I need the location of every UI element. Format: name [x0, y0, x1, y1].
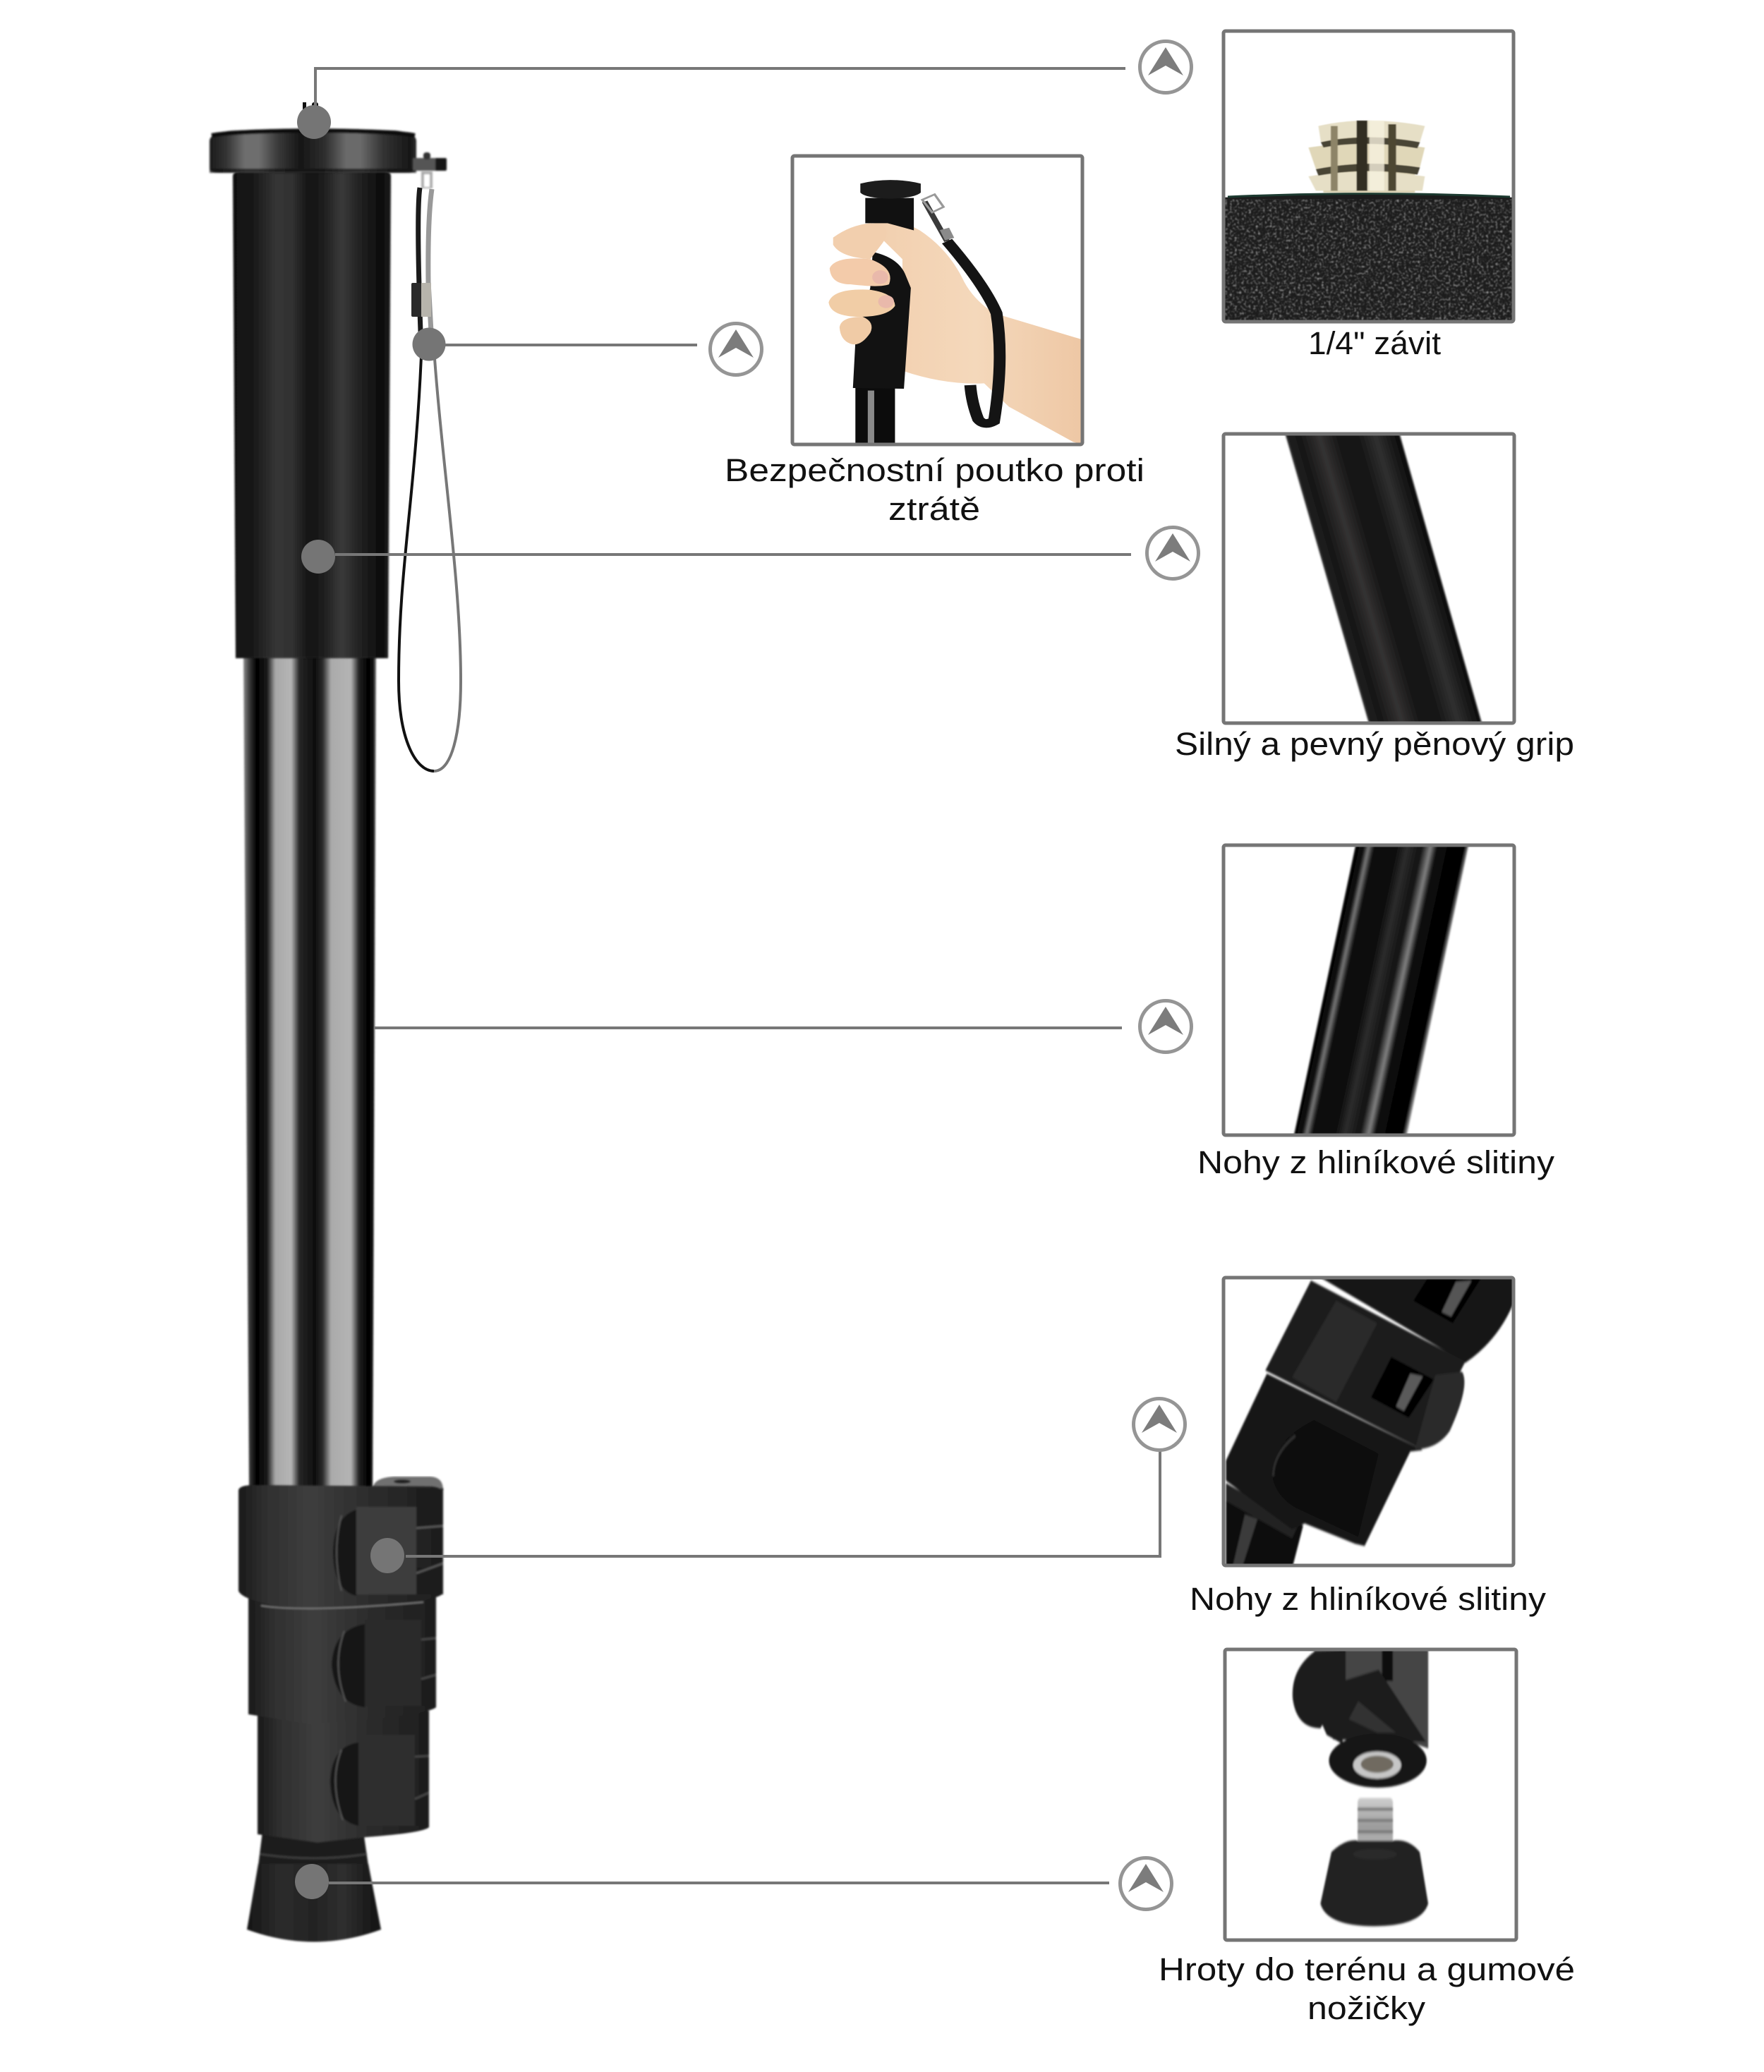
clamp 3	[258, 1711, 429, 1843]
clamp photo: ring	[1226, 1483, 1298, 1539]
clamp photo: lower clamp	[1226, 1374, 1422, 1546]
foot photo: socket disc	[1329, 1733, 1427, 1788]
rubber foot	[247, 1831, 381, 1941]
panel: clamps	[1224, 1274, 1516, 1568]
caption: grip: Silný a pevný pěnový grip	[1175, 726, 1574, 762]
icon: arrow feet	[1120, 1858, 1171, 1909]
strap loop	[399, 339, 434, 771]
foam tube	[1284, 430, 1483, 728]
hand photo: wrist strap	[947, 241, 1000, 423]
strap lug	[413, 152, 447, 188]
hand photo: fingers	[833, 223, 887, 259]
callout dot: grip	[301, 540, 335, 574]
infographic: monopod features	[208, 30, 1573, 2026]
caption: thread: 1/4" závit	[1308, 325, 1442, 361]
callout dot: clamp	[370, 1538, 404, 1573]
callout dot: foot	[295, 1864, 329, 1899]
icon: arrow legs	[1140, 1000, 1191, 1053]
icon: arrow strap	[710, 323, 762, 375]
panel: feet	[1225, 1649, 1516, 1940]
monopod pole	[243, 656, 376, 1489]
clamp 2	[248, 1591, 436, 1724]
hand photo: finger nails	[872, 270, 894, 308]
strap upper band	[418, 188, 421, 332]
brass screw	[1308, 121, 1425, 193]
monopod	[210, 102, 461, 1941]
caption: feet: nožičky	[1307, 1990, 1426, 2026]
panel: strap	[792, 156, 1085, 444]
clamp photo: windows	[1371, 1357, 1434, 1418]
aluminium tube	[1293, 840, 1470, 1141]
foot photo: rubber	[1320, 1841, 1428, 1926]
caption: clamps: Nohy z hliníkové slitiny	[1190, 1581, 1547, 1617]
bracket behind clamp	[373, 1477, 443, 1490]
icon: arrow clamps	[1133, 1398, 1185, 1450]
clamp photo: pole	[1226, 1494, 1303, 1568]
foot photo: screw	[1358, 1798, 1393, 1855]
foam grip	[233, 171, 391, 658]
caption: strap: Bezpečnostní poutko proti	[725, 452, 1144, 488]
top head plate	[210, 128, 416, 173]
connector lines	[315, 68, 1160, 1883]
foot photo: bracket	[1333, 1670, 1426, 1742]
caption: feet: Hroty do terénu a gumové	[1159, 1951, 1575, 1987]
panel: legs	[1224, 840, 1514, 1141]
caption: strap	[725, 452, 1144, 527]
strap sleeve	[411, 283, 421, 317]
hand photo: forearm and palm	[868, 222, 1085, 444]
caption: feet	[1159, 1951, 1575, 2026]
hand photo: grip	[865, 198, 914, 231]
caption: legs: Nohy z hliníkové slitiny	[1197, 1144, 1555, 1180]
foot photo: leg	[1314, 1649, 1428, 1748]
caption: strap: ztrátě	[888, 491, 980, 527]
clamp photo: upper segment	[1314, 1274, 1516, 1363]
callout dot: strap	[412, 327, 446, 361]
icon: arrow thread	[1140, 41, 1191, 93]
clamp 1	[238, 1485, 443, 1608]
strap with lug	[399, 152, 461, 771]
callout dot: thread	[297, 105, 331, 139]
hand photo: head	[860, 180, 921, 199]
leg clamps	[238, 1485, 443, 1843]
panel: thread	[1222, 31, 1515, 323]
foam top	[1222, 193, 1515, 323]
panel: grip	[1224, 430, 1514, 728]
icon: arrow grip	[1147, 528, 1198, 578]
clamp photo: middle band	[1265, 1280, 1466, 1449]
hand photo: pole	[855, 387, 895, 444]
screw tip	[303, 102, 318, 112]
clamp photo: side lump	[1415, 1372, 1464, 1449]
